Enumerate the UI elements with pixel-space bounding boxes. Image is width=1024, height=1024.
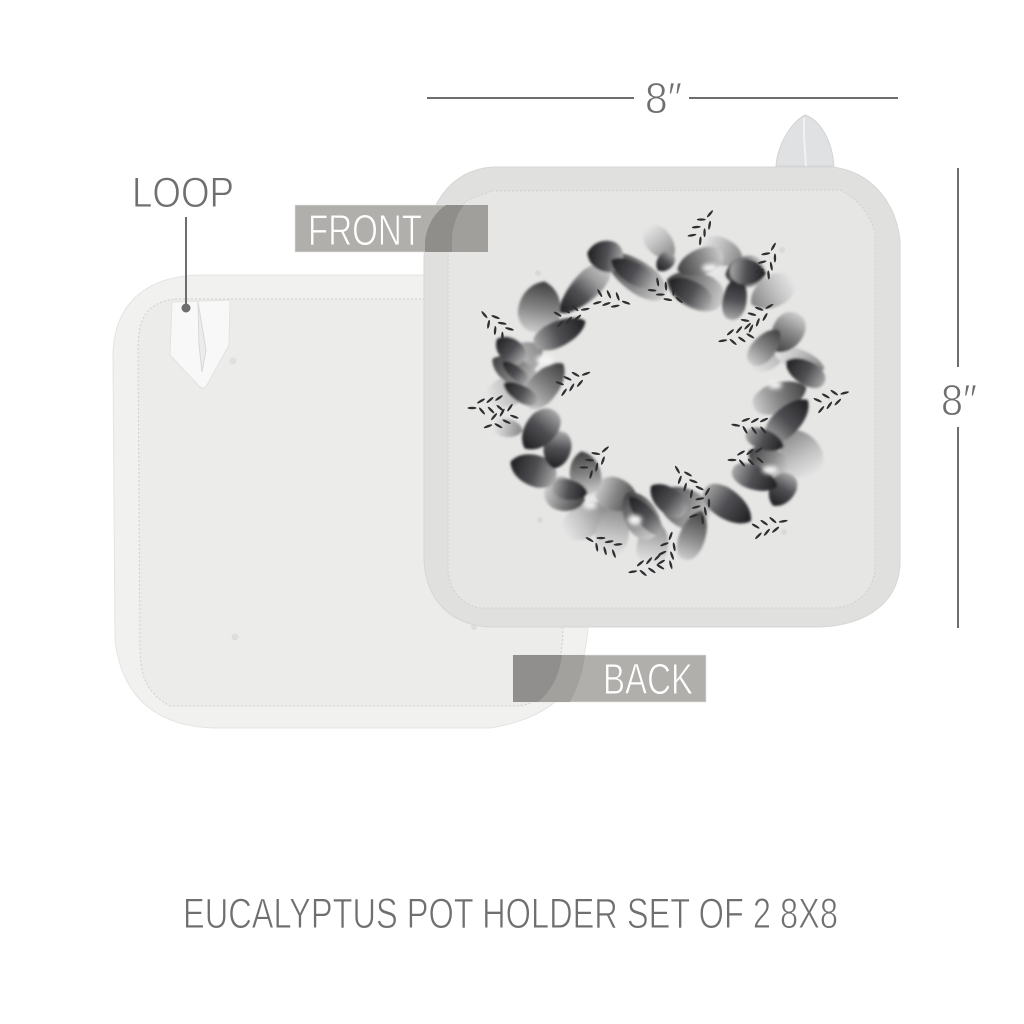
callout: LOOP label with leader: LOOP — [132, 169, 234, 217]
title: EUCALYPTUS POT HOLDER SET OF 2 8X8 — [183, 890, 838, 938]
icon: fabric hanging loop — [170, 300, 230, 388]
icon: fabric hanging loop on front — [776, 115, 834, 166]
panel: back pot holder — [113, 275, 588, 728]
dimension: height 8 inches: 8″ — [941, 376, 977, 425]
panel: front pot holder — [424, 115, 900, 627]
eucalyptus wreath illustration — [468, 206, 853, 580]
label: BACK — [513, 655, 706, 704]
label: FRONT: FRONT — [308, 206, 422, 255]
callout: LOOP label with leader — [132, 169, 234, 312]
dimension: width 8 inches: 8″ — [645, 74, 682, 123]
label: BACK: BACK — [603, 655, 693, 704]
